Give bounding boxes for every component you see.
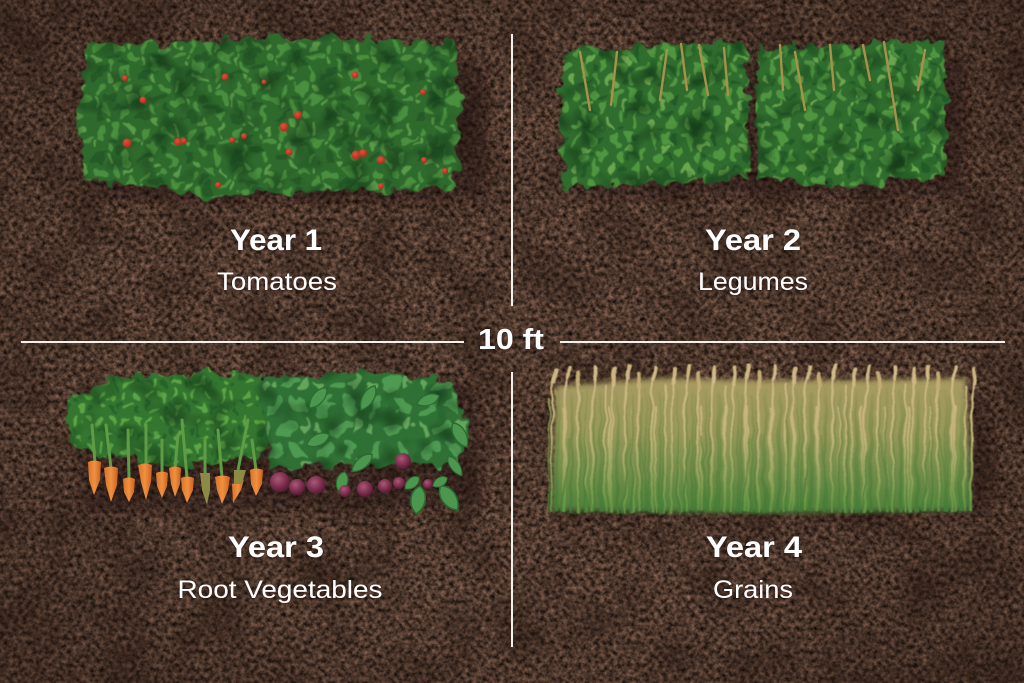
label: year 1 tomatoes: Year 1 — [230, 224, 322, 257]
label: year 2 legumes: Legumes — [698, 268, 808, 296]
label: year 1 tomatoes: Tomatoes — [217, 268, 337, 296]
label: year 3 root vegetables: Root Vegetables — [178, 576, 382, 604]
plot shadow: tomatoes — [92, 60, 484, 200]
pale carrots — [200, 470, 246, 505]
plot shadow: root vegetables — [80, 390, 480, 510]
carrot stems — [92, 420, 256, 478]
label: year 4 grains — [706, 531, 802, 604]
label: year 4 grains: Grains — [713, 576, 793, 604]
plot shadow: grains — [562, 395, 992, 515]
carrots — [88, 460, 263, 504]
large leaves — [304, 383, 472, 515]
label: year 3 root vegetables: Year 3 — [228, 531, 324, 564]
beets — [270, 453, 433, 497]
divider: horizontal right — [560, 341, 1005, 343]
wheat stalks — [548, 365, 976, 512]
label: year 4 grains: Year 4 — [706, 531, 802, 564]
divider: vertical upper — [511, 34, 513, 306]
panel: year 1 tomatoes — [80, 38, 484, 200]
label: year 1 tomatoes — [217, 224, 337, 296]
label: year 3 root vegetables — [178, 531, 382, 604]
legume foliage — [560, 40, 946, 188]
divider: horizontal left — [21, 341, 464, 343]
grain base — [552, 378, 970, 513]
label: year 2 legumes — [698, 224, 808, 296]
plot shadow: legumes — [572, 60, 964, 196]
panel: year 3 root vegetables — [66, 372, 480, 515]
turnip and beet greens — [256, 372, 468, 470]
carrot tops — [66, 372, 266, 470]
panel: year 2 legumes — [560, 40, 964, 196]
tomato fruit — [122, 72, 448, 189]
tomato foliage — [80, 38, 460, 198]
panel: year 4 grains — [548, 365, 992, 515]
dimension label: 10 ft — [478, 324, 544, 356]
bamboo stakes — [580, 42, 925, 130]
divider: vertical lower — [511, 372, 513, 647]
label: year 2 legumes: Year 2 — [705, 224, 801, 257]
